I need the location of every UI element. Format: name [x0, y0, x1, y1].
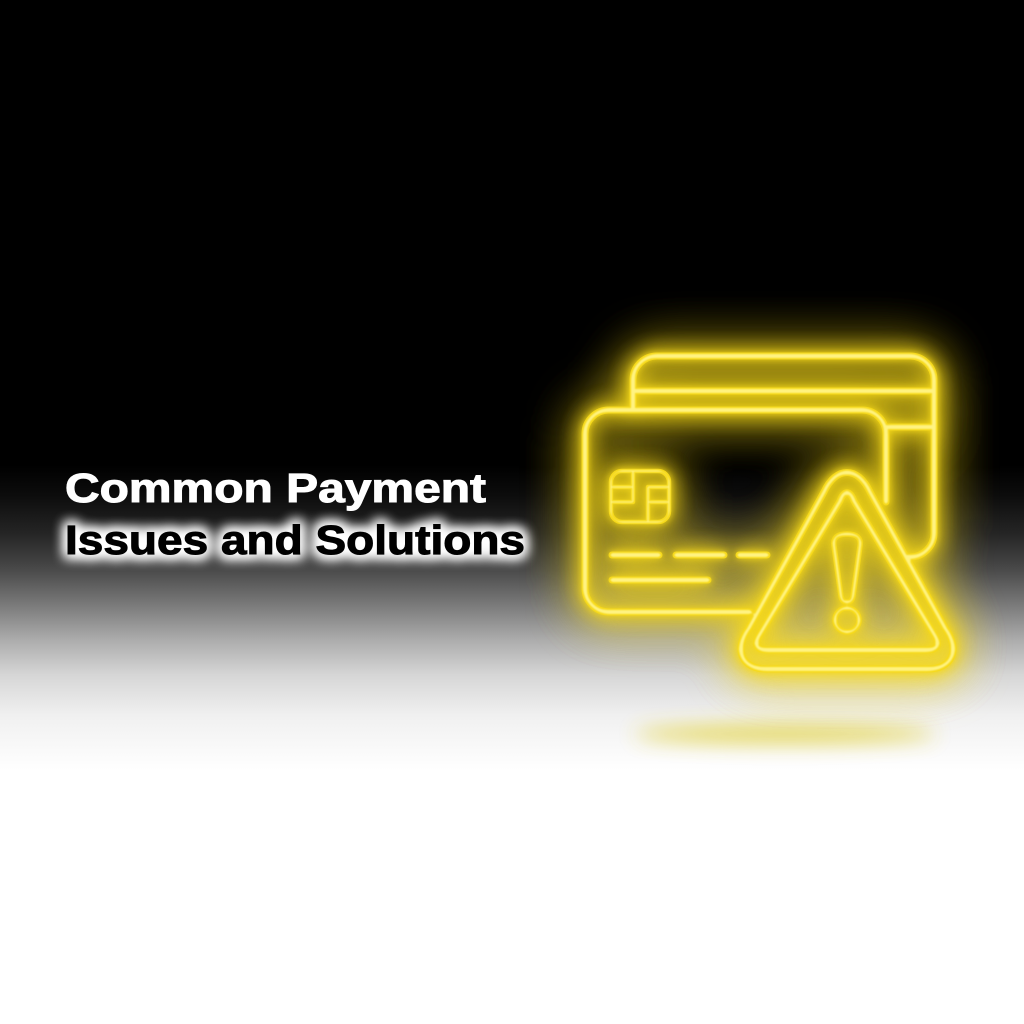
warning triangle inner	[757, 493, 937, 650]
card number dashes	[612, 552, 767, 558]
warning triangle outer	[741, 472, 953, 669]
title line 1: Common Payment	[65, 465, 486, 511]
title	[65, 465, 525, 563]
icon: credit cards with warning triangle	[585, 356, 953, 669]
floor reflection	[635, 725, 935, 743]
title line 2: Issues and Solutions	[65, 517, 525, 563]
back credit card	[633, 356, 934, 557]
card chip	[611, 471, 669, 522]
exclamation mark	[834, 534, 860, 632]
card name line	[612, 576, 708, 584]
front credit card	[585, 410, 886, 612]
